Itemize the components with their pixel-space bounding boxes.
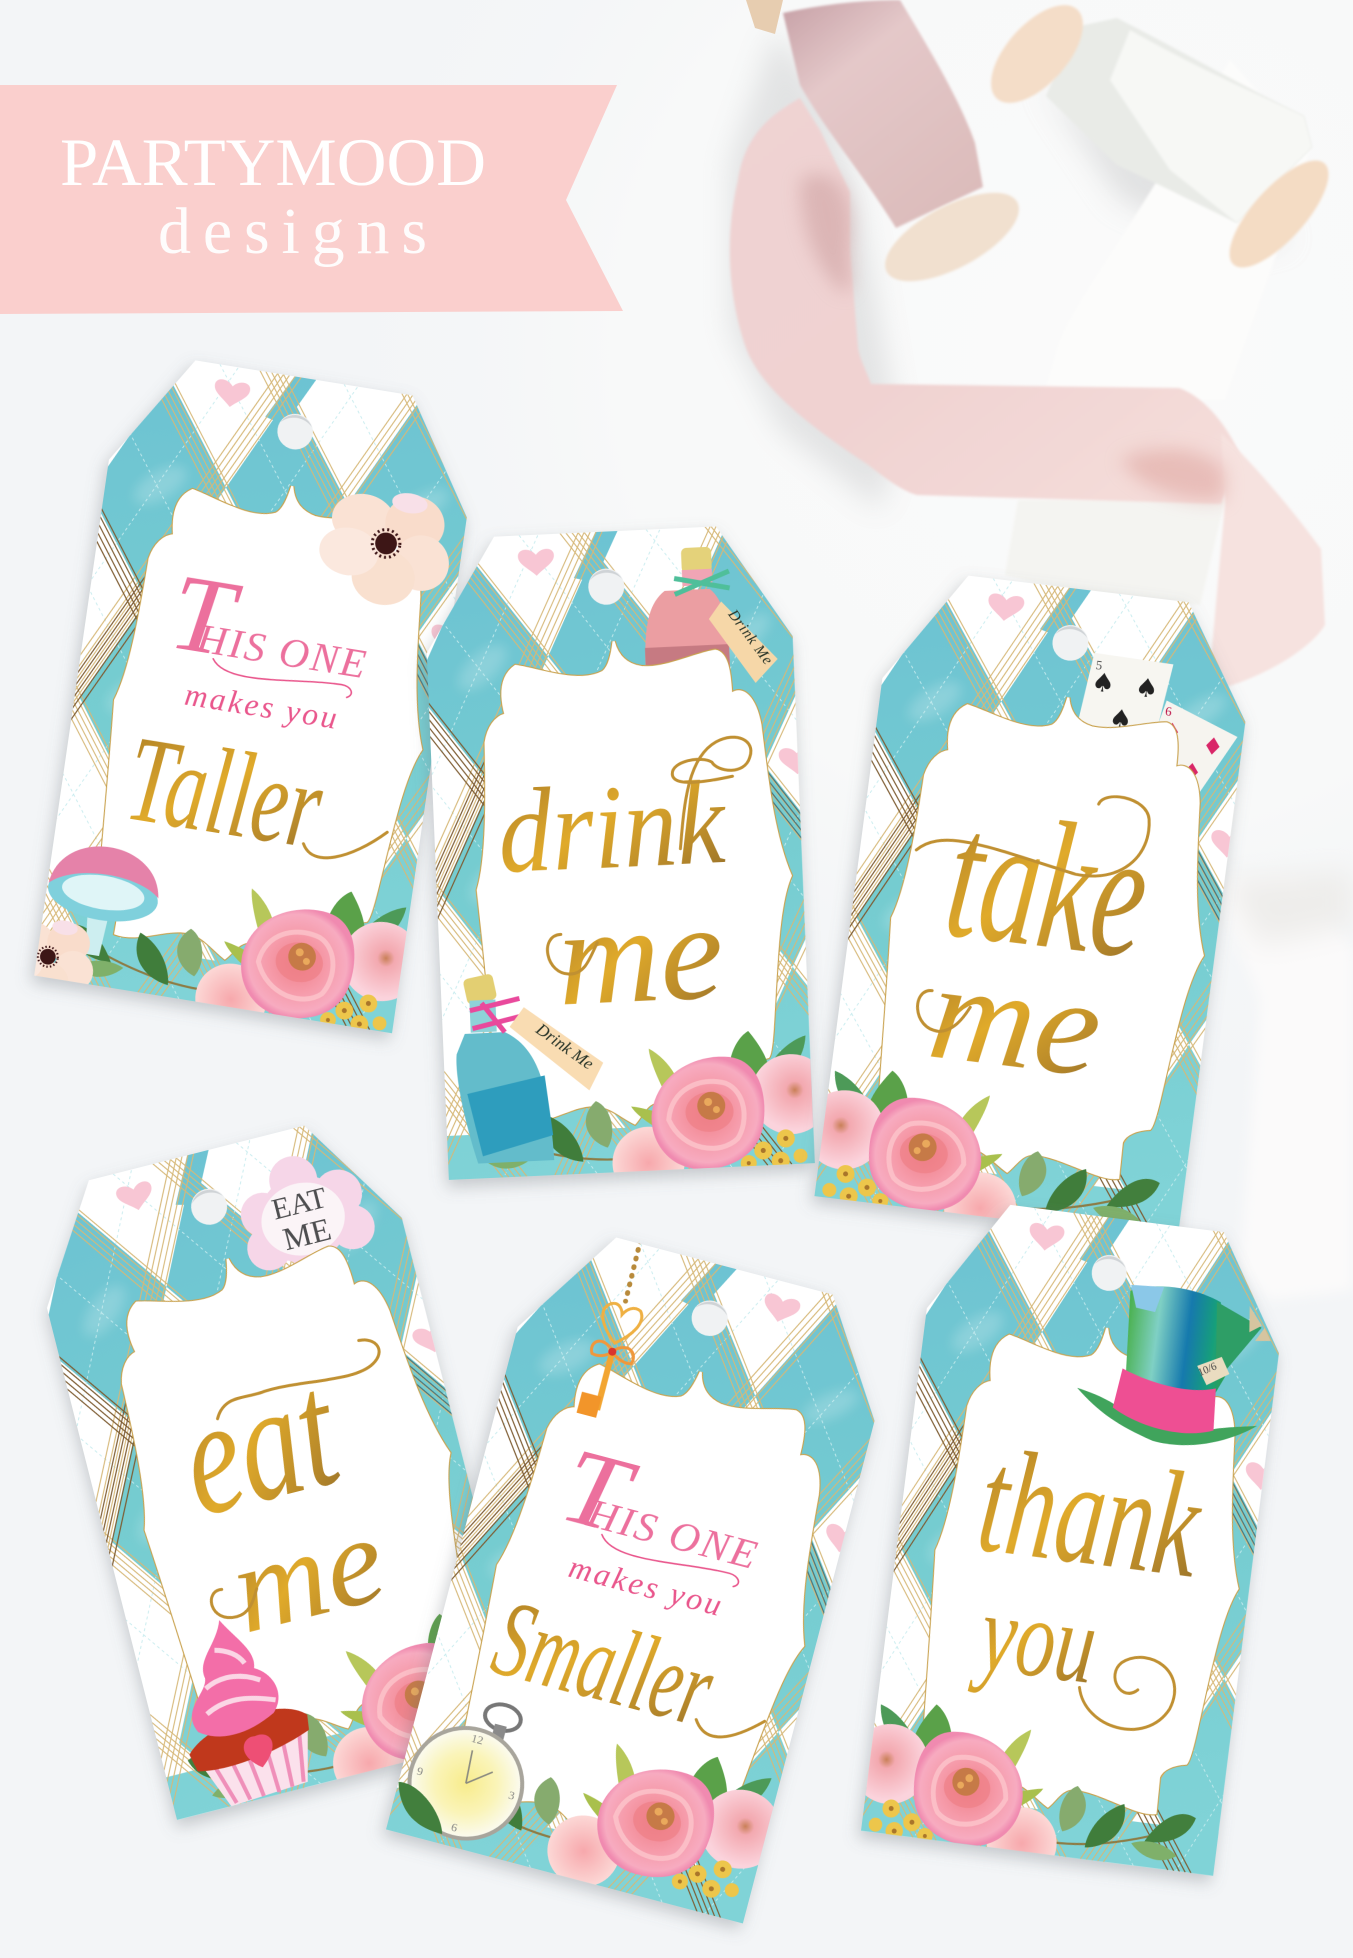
text: eat: eat [163,1336,356,1551]
text: This one: THIS ONE [550,1424,779,1593]
tag: thank you [852,1205,1282,1888]
icon: anemone flower [319,492,450,606]
text: makes you: makes you [565,1550,728,1624]
icon: pink bottle [644,547,730,667]
banner: Partymood designs [0,85,623,314]
icon: EAT ME cloud: ME [279,1210,335,1257]
tag: drink me [420,526,820,1194]
icon: pocket watch: 12 [470,1731,485,1748]
label: Drink Me (top): Drink Me [724,606,776,668]
icon: mad hatter hat [1077,1284,1271,1446]
text: me: me [922,934,1110,1107]
text: me: me [555,874,726,1035]
text: thank: thank [971,1416,1210,1609]
heading: PARTYMOOD: PARTYMOOD [60,124,486,200]
background: ribbon spools photo [300,0,1353,1300]
icon: golden key [575,1236,663,1423]
subheading: designs: designs [158,195,427,268]
icon: pocket watch [397,1686,542,1851]
icon: playing cards: ♦ [1179,757,1204,787]
label: Drink Me (bottom): Drink Me [532,1019,598,1074]
text: makes you: makes you [183,676,342,736]
tag: eat me [40,1126,475,1832]
icon: cupcake [189,1620,310,1806]
tag: take me [806,576,1249,1232]
icon: blue bottle [453,971,554,1164]
icon: playing cards: 5 [1095,657,1103,673]
text: me: me [218,1489,398,1660]
icon: playing cards: ♠ [1107,704,1134,736]
icon: small anemone [34,920,94,984]
tag: This one makes you smaller [378,1238,877,1934]
icon: playing cards: ♠ [1133,673,1160,705]
text: drink: drink [496,755,730,898]
icon: EAT ME cloud [240,1156,375,1271]
text: This one: THIS ONE [164,550,379,702]
text: you: you [967,1569,1103,1707]
icon: pocket watch: 3 [507,1788,516,1803]
icon: playing cards: 6 [1164,703,1173,719]
icon: pocket watch: 6 [450,1820,459,1835]
icon: EAT ME cloud: EAT [268,1180,330,1227]
text: take: take [936,772,1159,997]
text: Taller: Taller [119,710,331,875]
label: Drink Me (bottom) [509,1004,604,1094]
tag: This one makes you taller [26,360,470,1046]
label: Drink Me (top) [708,599,779,685]
text: Smaller: Smaller [482,1576,726,1751]
icon: playing cards: ♦ [1200,732,1225,762]
icon: playing cards: ♦ [1159,717,1184,747]
icon: mad hatter hat: 10/6 [1196,1360,1219,1379]
icon: playing cards [1079,652,1238,792]
icon: playing cards: ♠ [1090,668,1117,700]
icon: pocket watch: 9 [415,1764,425,1779]
icon: mushroom [48,846,159,956]
